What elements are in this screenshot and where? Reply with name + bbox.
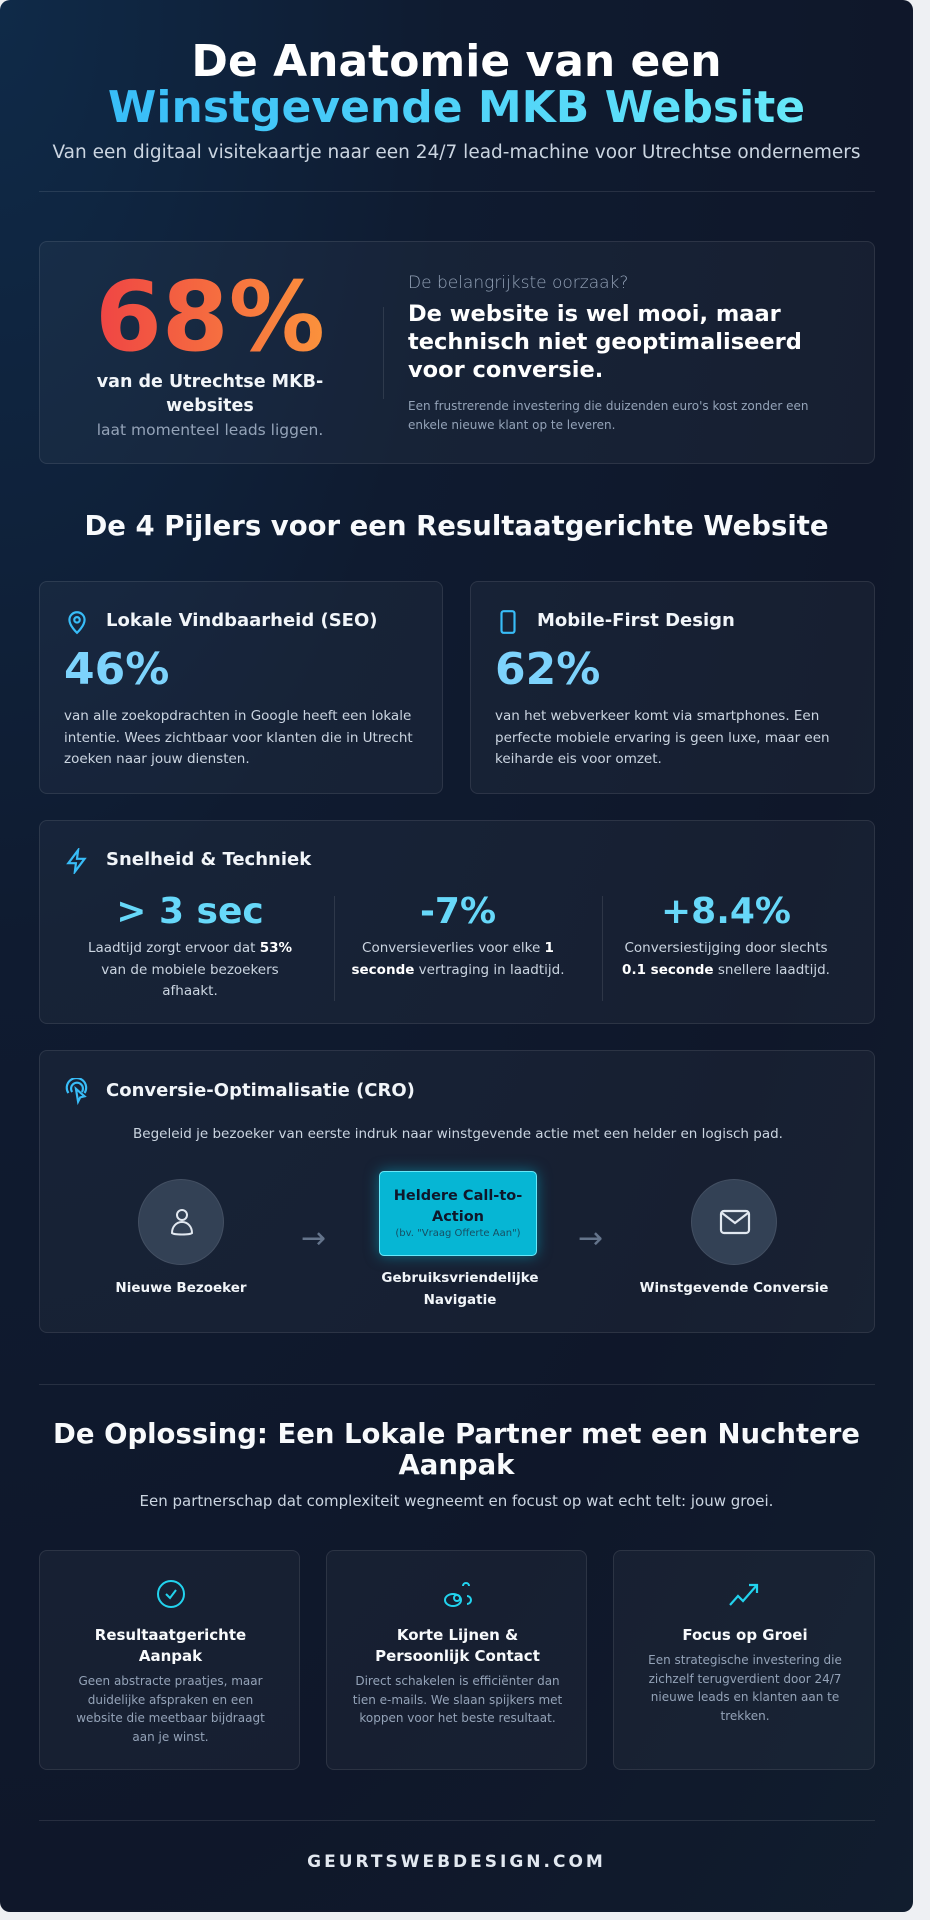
panel: CRO: Begeleid je bezoeker van eerste indruk naar winstgevende actie met een helder en logisch pad. <box>133 1126 783 1142</box>
cause text <box>408 273 808 432</box>
panel: CRO <box>39 1050 875 1333</box>
stat col 2: -7% <box>420 891 496 932</box>
step: conversion: Winstgevende Conversie <box>640 1280 828 1296</box>
title: De Anatomie van een <box>191 36 722 87</box>
panel: growth <box>613 1550 875 1770</box>
big stat 68%: 68% <box>95 261 325 373</box>
icon: location pin <box>68 611 86 634</box>
icon: smartphone <box>500 610 516 634</box>
icon: check circle <box>157 1580 185 1608</box>
stat caption <box>97 372 323 439</box>
step: visitor: Nieuwe Bezoeker <box>115 1280 247 1296</box>
panel: growth: Focus op Groei <box>682 1626 808 1644</box>
panel: speed: Snelheid & Techniek <box>106 849 311 870</box>
stat caption: van de Utrechtse MKB-websites <box>97 372 323 416</box>
panel: mobile: van het webverkeer komt via smartphones. Een perfecte mobiele ervaring is geen luxe, maar een keiharde eis voor omzet. <box>495 708 830 767</box>
step: CTA: (bv. "Vraag Offerte Aan") <box>395 1228 521 1239</box>
arrow: → <box>301 1221 326 1256</box>
stat col 3: +8.4% <box>661 891 791 932</box>
panel: growth: Een strategische investering die zichzelf terugverdient door 24/7 nieuwe leads en klanten aan te trekken. <box>648 1653 842 1722</box>
stat col 2 <box>351 891 564 978</box>
panel: speed <box>39 820 875 1024</box>
stat col 1 <box>88 891 292 999</box>
panel: short lines <box>326 1550 587 1770</box>
panel: CRO: Conversie-Optimalisatie (CRO) <box>106 1080 415 1101</box>
arrow: → <box>578 1221 603 1256</box>
panel: short lines: Direct schakelen is efficiënter dan tien e-mails. We slaan spijkers met koppen voor het beste resultaat. <box>353 1674 562 1725</box>
panel: mobile: 62% <box>495 644 600 695</box>
step: CTA: Gebruiksvriendelijke <box>381 1270 539 1286</box>
solution subtitle: Een partnerschap dat complexiteit wegneemt en focust op wat echt telt: jouw groei. <box>140 1492 773 1510</box>
panel: SEO: Lokale Vindbaarheid (SEO) <box>106 610 378 631</box>
stat col 3 <box>622 891 830 978</box>
panel: SEO <box>39 581 443 794</box>
panel: SEO: 46% <box>64 644 169 695</box>
icon: trending up <box>729 1584 758 1606</box>
panel: SEO: van alle zoekopdrachten in Google heeft een lokale intentie. Wees zichtbaar voor klanten die in Utrecht zoeken naar jouw diensten. <box>64 708 413 767</box>
stat col 3: Conversiestijging door slechts 0.1 seconde snellere laadtijd. <box>622 940 830 978</box>
cause text: Een frustrerende investering die duizenden euro's kost zonder een enkele nieuwe klant op te leveren. <box>408 399 808 432</box>
panel: mobile <box>470 581 875 794</box>
step: CTA <box>370 1162 546 1308</box>
icon: click target <box>66 1078 88 1105</box>
stat col 1: Laadtijd zorgt ervoor dat 53% van de mobiele bezoekers afhaakt. <box>88 940 292 999</box>
cause text: De website is wel mooi, maar technisch niet geoptimaliseerd voor conversie. <box>408 301 802 383</box>
section heading: solution: De Oplossing: Een Lokale Partner met een Nuchtere Aanpak <box>53 1418 860 1481</box>
step: CTA: Navigatie <box>424 1292 496 1308</box>
panel: result-oriented: Resultaatgerichte Aanpak <box>95 1626 246 1665</box>
section heading: pillars: De 4 Pijlers voor een Resultaatgerichte Website <box>84 510 829 542</box>
icon: lightning <box>66 848 87 874</box>
stat col 2: Conversieverlies voor elke 1 seconde vertraging in laadtijd. <box>351 940 564 978</box>
step: visitor <box>115 1179 247 1296</box>
stat caption: laat momenteel leads liggen. <box>97 421 323 439</box>
step: CTA: Heldere Call-to-Action <box>394 1188 522 1225</box>
panel: short lines: Korte Lijnen & Persoonlijk Contact <box>375 1626 540 1665</box>
subtitle: Van een digitaal visitekaartje naar een 24/7 lead-machine voor Utrechtse ondernemers <box>52 142 861 163</box>
panel: result-oriented <box>39 1550 300 1770</box>
cause text: De belangrijkste oorzaak? <box>408 273 628 293</box>
panel: result-oriented: Geen abstracte praatjes, maar duidelijke afspraken en een website die meetbaar bijdraagt aan je winst. <box>76 1674 265 1744</box>
panel: hero stat <box>39 241 875 464</box>
icon: handshake <box>444 1582 472 1607</box>
stat col 1: > 3 sec <box>116 891 264 932</box>
panel: mobile: Mobile-First Design <box>537 610 735 631</box>
title <box>108 36 805 133</box>
step: conversion <box>640 1179 828 1296</box>
footer: GEURTSWEBDESIGN.COM <box>307 1852 606 1872</box>
title: Winstgevende MKB Website <box>108 82 805 133</box>
